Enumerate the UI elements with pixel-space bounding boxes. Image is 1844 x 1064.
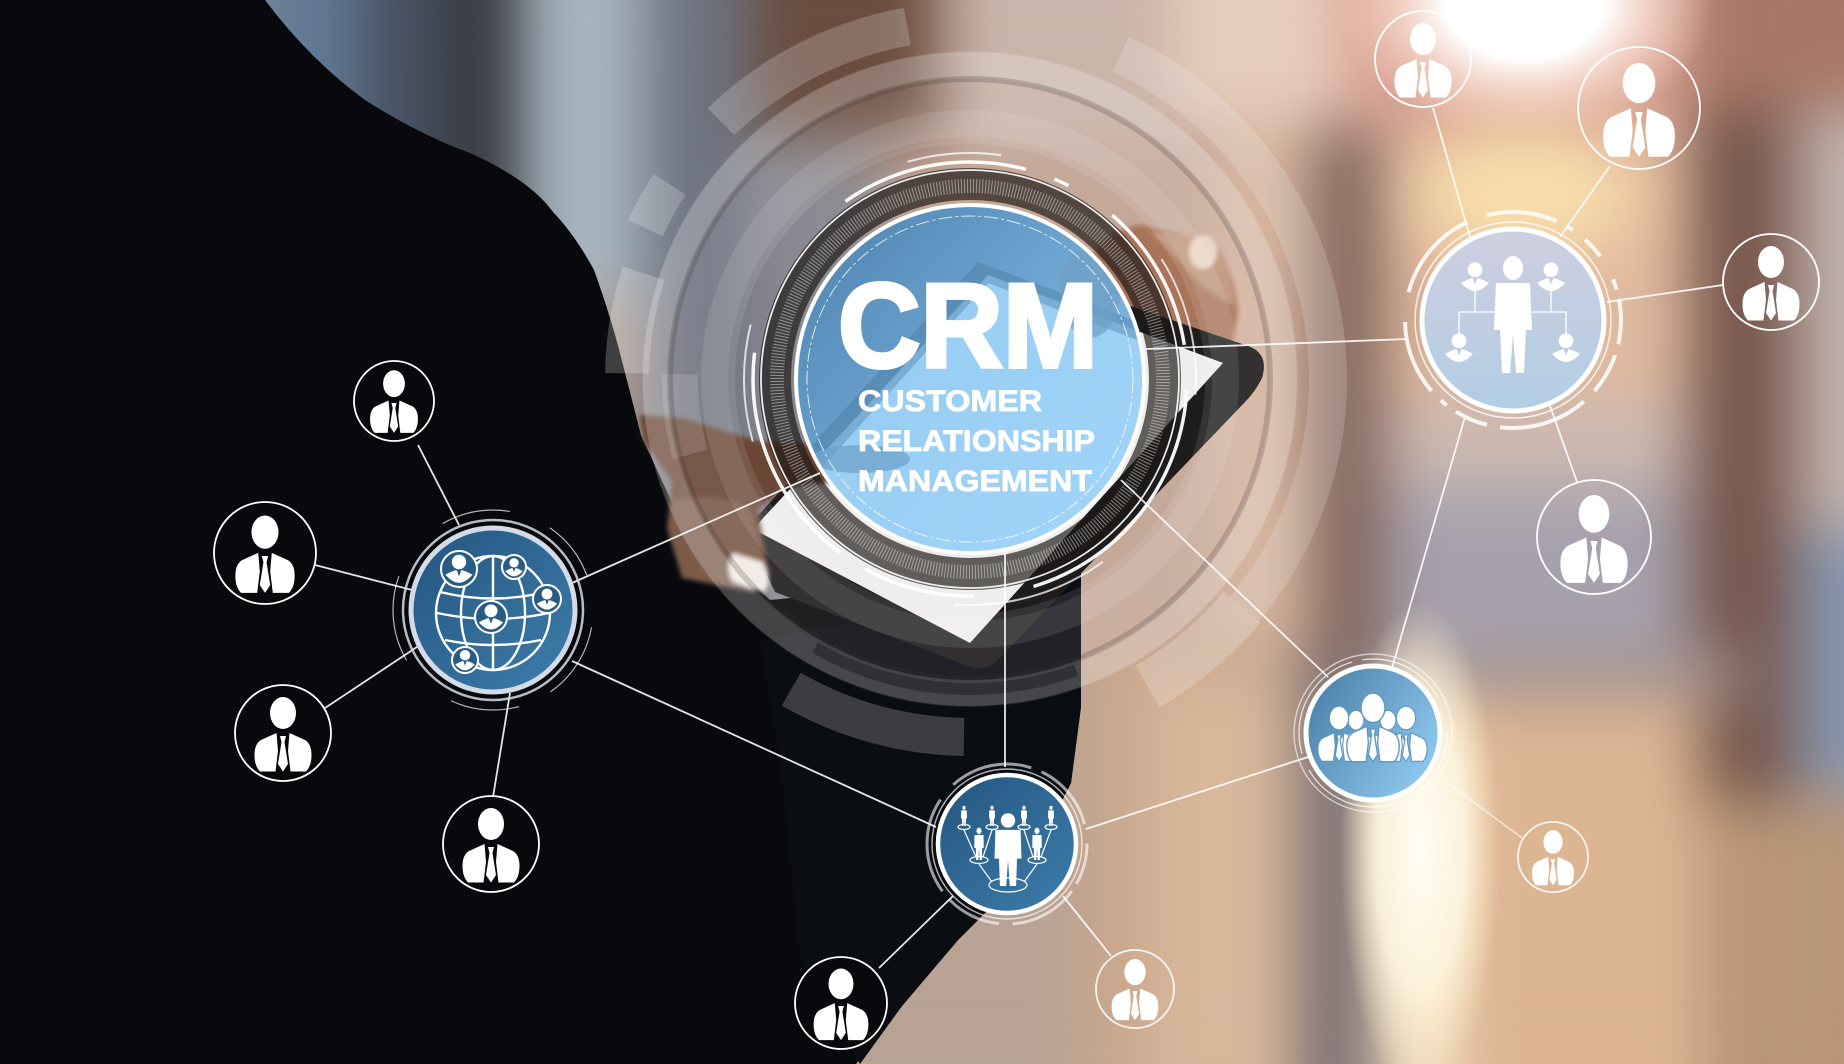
group figures xyxy=(1318,693,1427,762)
person nodes: left cluster xyxy=(214,361,539,892)
concentric HUD rings xyxy=(612,21,1328,737)
org chart connectors xyxy=(1459,290,1566,335)
jacket silhouette xyxy=(0,0,1081,1064)
badge figures xyxy=(445,555,557,670)
connector lines xyxy=(315,108,1723,968)
hub: team pyramid xyxy=(927,764,1087,924)
person node xyxy=(354,361,434,441)
hub: global network xyxy=(393,510,593,710)
person node xyxy=(1578,47,1700,169)
central CRM circle xyxy=(794,203,1146,555)
tablet xyxy=(745,258,1264,668)
subtitle line 2: RELATIONSHIP xyxy=(858,425,1095,458)
subtitle line 1: CUSTOMER xyxy=(858,385,1042,418)
person node xyxy=(214,502,316,604)
person nodes: bottom cluster xyxy=(795,822,1588,1049)
person node xyxy=(1375,11,1471,107)
org chart figures xyxy=(1445,256,1580,373)
person node xyxy=(1537,480,1651,594)
person node xyxy=(1518,822,1588,892)
finger seen through circle xyxy=(810,445,910,473)
person node xyxy=(1096,950,1174,1028)
globe icon xyxy=(436,556,550,670)
hub: group of people xyxy=(1294,654,1452,812)
person node xyxy=(795,957,887,1049)
pyramid connectors xyxy=(958,824,1057,892)
left hand with finger on tablet xyxy=(639,415,907,592)
globe person badges xyxy=(441,551,561,673)
person node xyxy=(1723,234,1819,330)
right hand holding tablet xyxy=(1085,225,1238,350)
pyramid figures xyxy=(961,806,1054,886)
hub: organisation chart xyxy=(1405,212,1621,428)
subtitle line 3: MANAGEMENT xyxy=(858,465,1092,498)
person node xyxy=(235,685,331,781)
title CRM: CRM xyxy=(838,259,1098,393)
right thumb seen through circle xyxy=(1060,246,1120,338)
person nodes: right cluster xyxy=(1375,11,1819,594)
person node xyxy=(443,796,539,892)
tablet screen seen through circle xyxy=(818,275,1142,551)
